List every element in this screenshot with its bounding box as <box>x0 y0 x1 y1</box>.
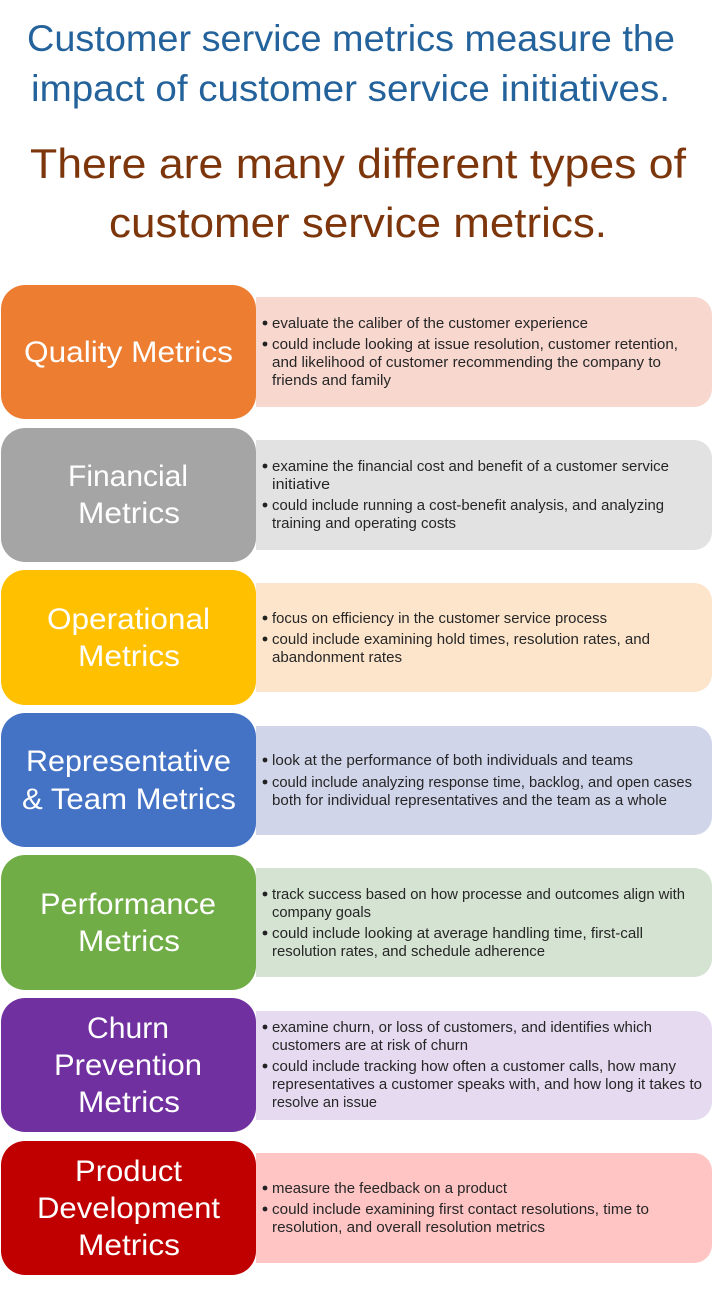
label box: Metrics <box>78 640 180 673</box>
label box <box>1 998 256 1132</box>
label box <box>1 570 256 705</box>
description box: company goals <box>272 905 371 921</box>
description box: track success based on how processe and outcomes align with <box>272 887 685 903</box>
panel: operational metrics <box>1 570 712 705</box>
description box <box>256 868 712 977</box>
label box: Operational <box>47 603 210 636</box>
description box: resolution, and overall resolution metrics <box>272 1220 545 1236</box>
heading: brown subtitle: customer service metrics. <box>109 199 607 246</box>
panel: quality metrics <box>1 285 712 419</box>
panel: financial metrics <box>1 428 712 562</box>
description box: abandonment rates <box>272 650 402 666</box>
title: blue intro heading: impact of customer service initiatives. <box>31 68 670 109</box>
label box: Prevention <box>54 1049 202 1082</box>
label box: & Team Metrics <box>22 783 236 816</box>
description box <box>256 1011 712 1120</box>
description box: both for individual representatives and the team as a whole <box>272 793 667 809</box>
description box: customers are at risk of churn <box>272 1038 468 1054</box>
description box <box>256 297 712 407</box>
description box: and likelihood of customer recommending the company to <box>272 355 661 371</box>
description box: resolve an issue <box>272 1095 377 1111</box>
label box: Metrics <box>78 497 180 530</box>
description box: training and operating costs <box>272 516 456 532</box>
description box: could include looking at average handling time, first-call <box>272 926 643 942</box>
description box <box>256 440 712 550</box>
description box <box>256 1153 712 1263</box>
label box: Representative <box>26 745 231 778</box>
description box <box>256 583 712 692</box>
title: blue intro heading: Customer service metrics measure the <box>27 18 675 59</box>
description box: could include analyzing response time, backlog, and open cases <box>272 775 692 791</box>
heading: brown subtitle: There are many different types of <box>30 140 686 187</box>
description box: could include running a cost-benefit analysis, and analyzing <box>272 498 664 514</box>
label box: Financial <box>68 460 188 493</box>
label box: Metrics <box>78 1229 180 1262</box>
description box: representatives a customer speaks with, and how long it takes to <box>272 1077 702 1093</box>
label box <box>1 855 256 990</box>
panel: churn prevention metrics <box>1 998 712 1132</box>
heading: brown subtitle <box>30 140 686 246</box>
description box: look at the performance of both individuals and teams <box>272 753 633 769</box>
description box: could include examining hold times, resolution rates, and <box>272 632 650 648</box>
label box: Development <box>37 1192 220 1225</box>
title: blue intro heading <box>27 18 675 109</box>
description box: could include examining first contact resolutions, time to <box>272 1202 649 1218</box>
label box: Performance <box>40 888 216 921</box>
description box: measure the feedback on a product <box>272 1181 507 1197</box>
panel: representative and team metrics <box>1 713 712 847</box>
label box <box>1 713 256 847</box>
label box: Quality Metrics <box>24 336 233 369</box>
description box: friends and family <box>272 373 392 389</box>
label box: Metrics <box>78 925 180 958</box>
description box: evaluate the caliber of the customer experience <box>272 316 588 332</box>
label box: Product <box>75 1155 182 1188</box>
panel: performance metrics <box>1 855 712 990</box>
label box <box>1 285 256 419</box>
description box <box>256 726 712 835</box>
description box: examine the financial cost and benefit of a customer service <box>272 459 669 475</box>
description box: could include tracking how often a customer calls, how many <box>272 1059 677 1075</box>
label box: Metrics <box>78 1086 180 1119</box>
description box: resolution rates, and schedule adherence <box>272 944 545 960</box>
description box: could include looking at issue resolution, customer retention, <box>272 337 678 353</box>
panel: product development metrics <box>1 1141 712 1275</box>
label box <box>1 1141 256 1275</box>
label box: Churn <box>87 1012 169 1045</box>
label box <box>1 428 256 562</box>
description box: examine churn, or loss of customers, and identifies which <box>272 1020 652 1036</box>
description box: initiative <box>272 477 330 493</box>
description box: focus on efficiency in the customer service process <box>272 611 607 627</box>
